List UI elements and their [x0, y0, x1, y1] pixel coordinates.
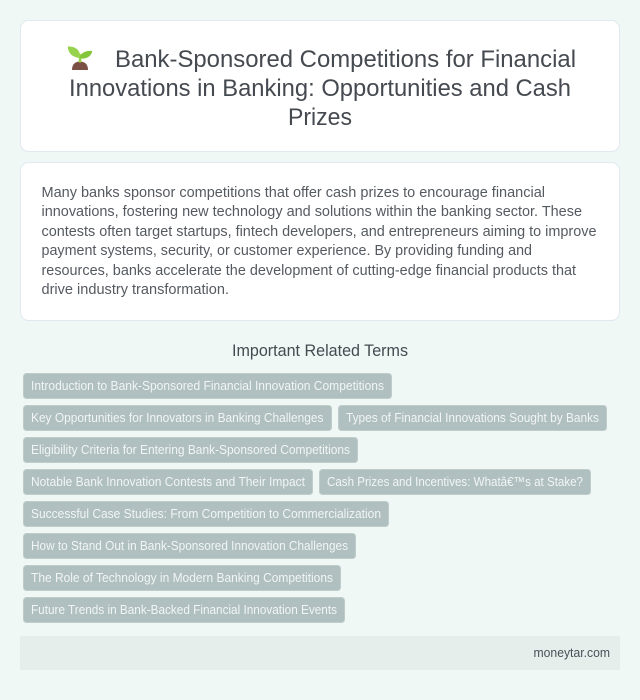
tag: types of innovations: [338, 406, 606, 430]
tag: introduction: [24, 374, 392, 398]
heading: important related terms: Important Related Terms: [232, 342, 408, 360]
description text: Many banks sponsor competitions that offer cash prizes to encourage financial: [42, 184, 545, 201]
title: [69, 46, 576, 131]
description text: drive industry transformation.: [42, 281, 229, 298]
description text: innovations, fostering new technology and solutions within the banking sector. These: [42, 203, 582, 220]
panel: related term tags: [24, 374, 606, 622]
title: Prizes: [288, 104, 352, 131]
title: Bank-Sponsored Competitions for Financial: [115, 46, 576, 73]
tag: notable contests: [24, 470, 312, 494]
footer: [20, 636, 620, 670]
footer source text: moneytar.com: [534, 645, 610, 660]
tag: case studies: Successful Case Studies: From Competition to Commercialization: [31, 506, 381, 521]
tag: notable contests: Notable Bank Innovation Contests and Their Impact: [31, 474, 305, 489]
description text: payment systems, security, or customer experience. By providing funding and: [42, 242, 532, 259]
tag: cash prizes: [320, 470, 590, 494]
tag: case studies: [24, 502, 388, 526]
title: Innovations in Banking: Opportunities and Cash: [69, 75, 571, 102]
tag: stand out: [24, 534, 356, 558]
panel: title card: [20, 20, 620, 152]
tag: types of innovations: Types of Financial Innovations Sought by Banks: [346, 410, 599, 425]
tag: role of technology: The Role of Technology in Modern Banking Competitions: [31, 570, 333, 585]
tag: future trends: Future Trends in Bank-Backed Financial Innovation Events: [31, 602, 337, 617]
tag: role of technology: [24, 566, 340, 590]
tag: cash prizes: Cash Prizes and Incentives: Whatâ€™s at Stake?: [327, 474, 583, 489]
icon: seedling: [68, 46, 92, 70]
tag: key opportunities: Key Opportunities for Innovators in Banking Challenges: [31, 410, 324, 425]
description text: [42, 184, 596, 298]
tag: stand out: How to Stand Out in Bank-Sponsored Innovation Challenges: [31, 538, 348, 553]
tag: key opportunities: [24, 406, 332, 430]
description text: contests often target startups, fintech developers, and entrepreneurs aiming to improve: [42, 223, 596, 240]
tag: eligibility: [24, 438, 358, 462]
tag: future trends: [24, 598, 344, 622]
description text: resources, banks accelerate the development of cutting-edge financial products that: [42, 262, 577, 279]
tag: eligibility: Eligibility Criteria for Entering Bank-Sponsored Competitions: [31, 442, 350, 457]
tag: introduction: Introduction to Bank-Sponsored Financial Innovation Competitions: [31, 378, 384, 393]
panel: description: [20, 162, 620, 320]
